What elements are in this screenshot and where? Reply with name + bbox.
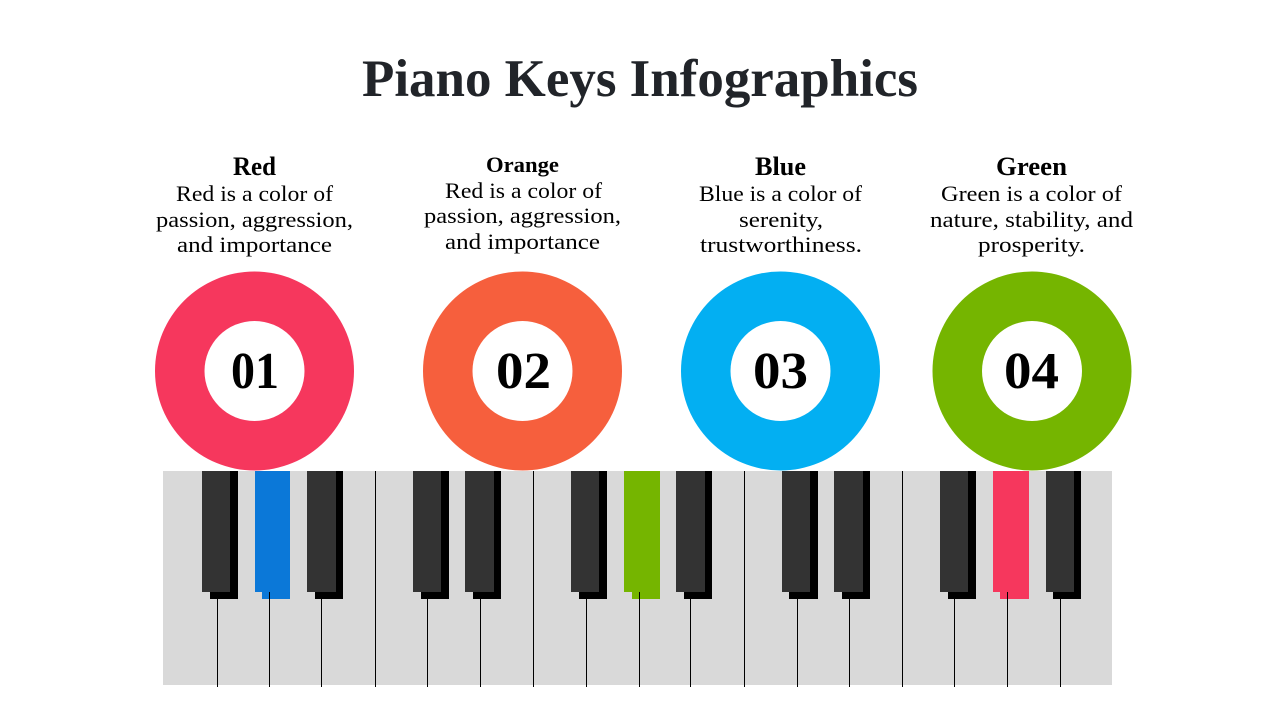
icon: green ring 04: 04	[1004, 343, 1059, 400]
icon: red ring 01: 01	[231, 343, 279, 400]
text block: green description: Green is a color of	[941, 181, 1123, 206]
text block: blue description: trustworthiness.	[700, 232, 862, 257]
text block: green description: prosperity.	[978, 232, 1085, 257]
text block: red description: passion, aggression,	[156, 207, 353, 232]
icon: orange ring 02	[423, 272, 622, 470]
piano keyboard	[163, 471, 1112, 687]
icon: blue ring 03	[681, 272, 880, 470]
panel: orange	[423, 152, 622, 470]
text block: orange description: and importance	[445, 229, 600, 254]
text block: orange description: passion, aggression,	[424, 203, 621, 228]
heading: blue: Blue	[755, 152, 806, 181]
panel: green	[930, 152, 1133, 470]
text block: green description	[930, 181, 1133, 257]
text block: orange description	[424, 178, 621, 254]
heading: orange: Orange	[486, 152, 559, 177]
red key	[993, 471, 1029, 599]
black keys	[202, 471, 1081, 599]
title: Piano Keys Infographics	[362, 50, 918, 108]
panel: blue	[681, 152, 880, 470]
text block: blue description: Blue is a color of	[699, 181, 863, 206]
green key	[624, 471, 660, 599]
text block: orange description: Red is a color of	[445, 178, 603, 203]
icon: orange ring 02: 02	[496, 343, 551, 400]
text block: blue description: serenity,	[739, 207, 823, 232]
blue key	[255, 471, 290, 599]
heading: red: Red	[233, 152, 277, 181]
text block: green description: nature, stability, and	[930, 207, 1133, 232]
icon: green ring 04	[932, 272, 1132, 470]
panel: red	[155, 152, 354, 470]
text block: red description: Red is a color of	[176, 181, 334, 206]
icon: red ring 01	[155, 272, 354, 470]
icon: blue ring 03: 03	[753, 343, 808, 400]
text block: red description: and importance	[177, 232, 332, 257]
text block: red description	[156, 181, 353, 257]
heading: green: Green	[996, 152, 1068, 181]
text block: blue description	[699, 181, 863, 257]
